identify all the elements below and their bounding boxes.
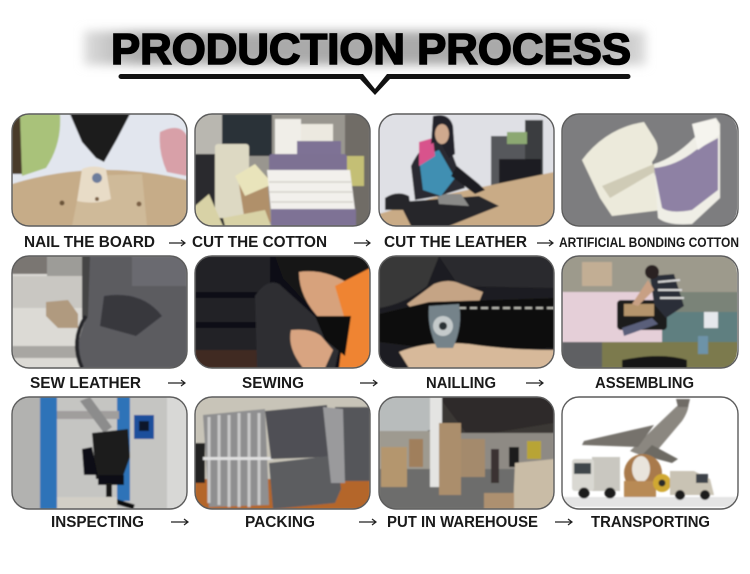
- arrow: [168, 380, 185, 386]
- label: sew leather: SEW LEATHER: [30, 375, 141, 392]
- label: nailling: NAILLING: [426, 375, 496, 392]
- photo: packing: [195, 397, 370, 509]
- photo: cut the leather: [379, 114, 554, 226]
- label: nail the board: NAIL THE BOARD: [24, 234, 155, 251]
- label: cut the cotton: CUT THE COTTON: [192, 234, 327, 251]
- title underline with pointer: [118, 74, 630, 95]
- title: PRODUCTION PROCESS: [111, 25, 631, 74]
- arrow: [360, 380, 377, 386]
- icon: van: [670, 471, 714, 495]
- arrow: [354, 240, 370, 246]
- title banner: [84, 25, 646, 74]
- label: packing: PACKING: [245, 514, 315, 531]
- arrow: [169, 240, 185, 246]
- photo: inspecting: [12, 397, 187, 509]
- label: sewing: SEWING: [242, 375, 304, 392]
- arrow: [171, 519, 188, 525]
- label: cut the leather: CUT THE LEATHER: [384, 234, 527, 251]
- photo: put in warehouse: [379, 397, 554, 509]
- photo: sew leather: [12, 256, 187, 368]
- photo: artificial bonding cotton: [562, 114, 738, 226]
- icon: boxes and wheel: [624, 481, 656, 497]
- photo: assembling: [562, 256, 738, 368]
- photo: sewing: [195, 256, 370, 368]
- label: inspecting: INSPECTING: [51, 514, 144, 531]
- label: transporting: TRANSPORTING: [591, 514, 710, 531]
- photo: transporting: [562, 397, 738, 509]
- arrow: [555, 519, 572, 525]
- arrow: [526, 380, 543, 386]
- icon: globe: [623, 454, 663, 482]
- label: assembling: ASSEMBLING: [595, 375, 694, 392]
- icon: truck: [592, 457, 620, 491]
- photo: nailing: [379, 256, 554, 368]
- label: put in warehouse: PUT IN WAREHOUSE: [387, 514, 538, 531]
- icon: airplane: [630, 405, 689, 456]
- photo: cut the cotton: [195, 114, 370, 226]
- arrow: [537, 240, 553, 246]
- arrow: [359, 519, 376, 525]
- photo: nail the board: [12, 114, 187, 226]
